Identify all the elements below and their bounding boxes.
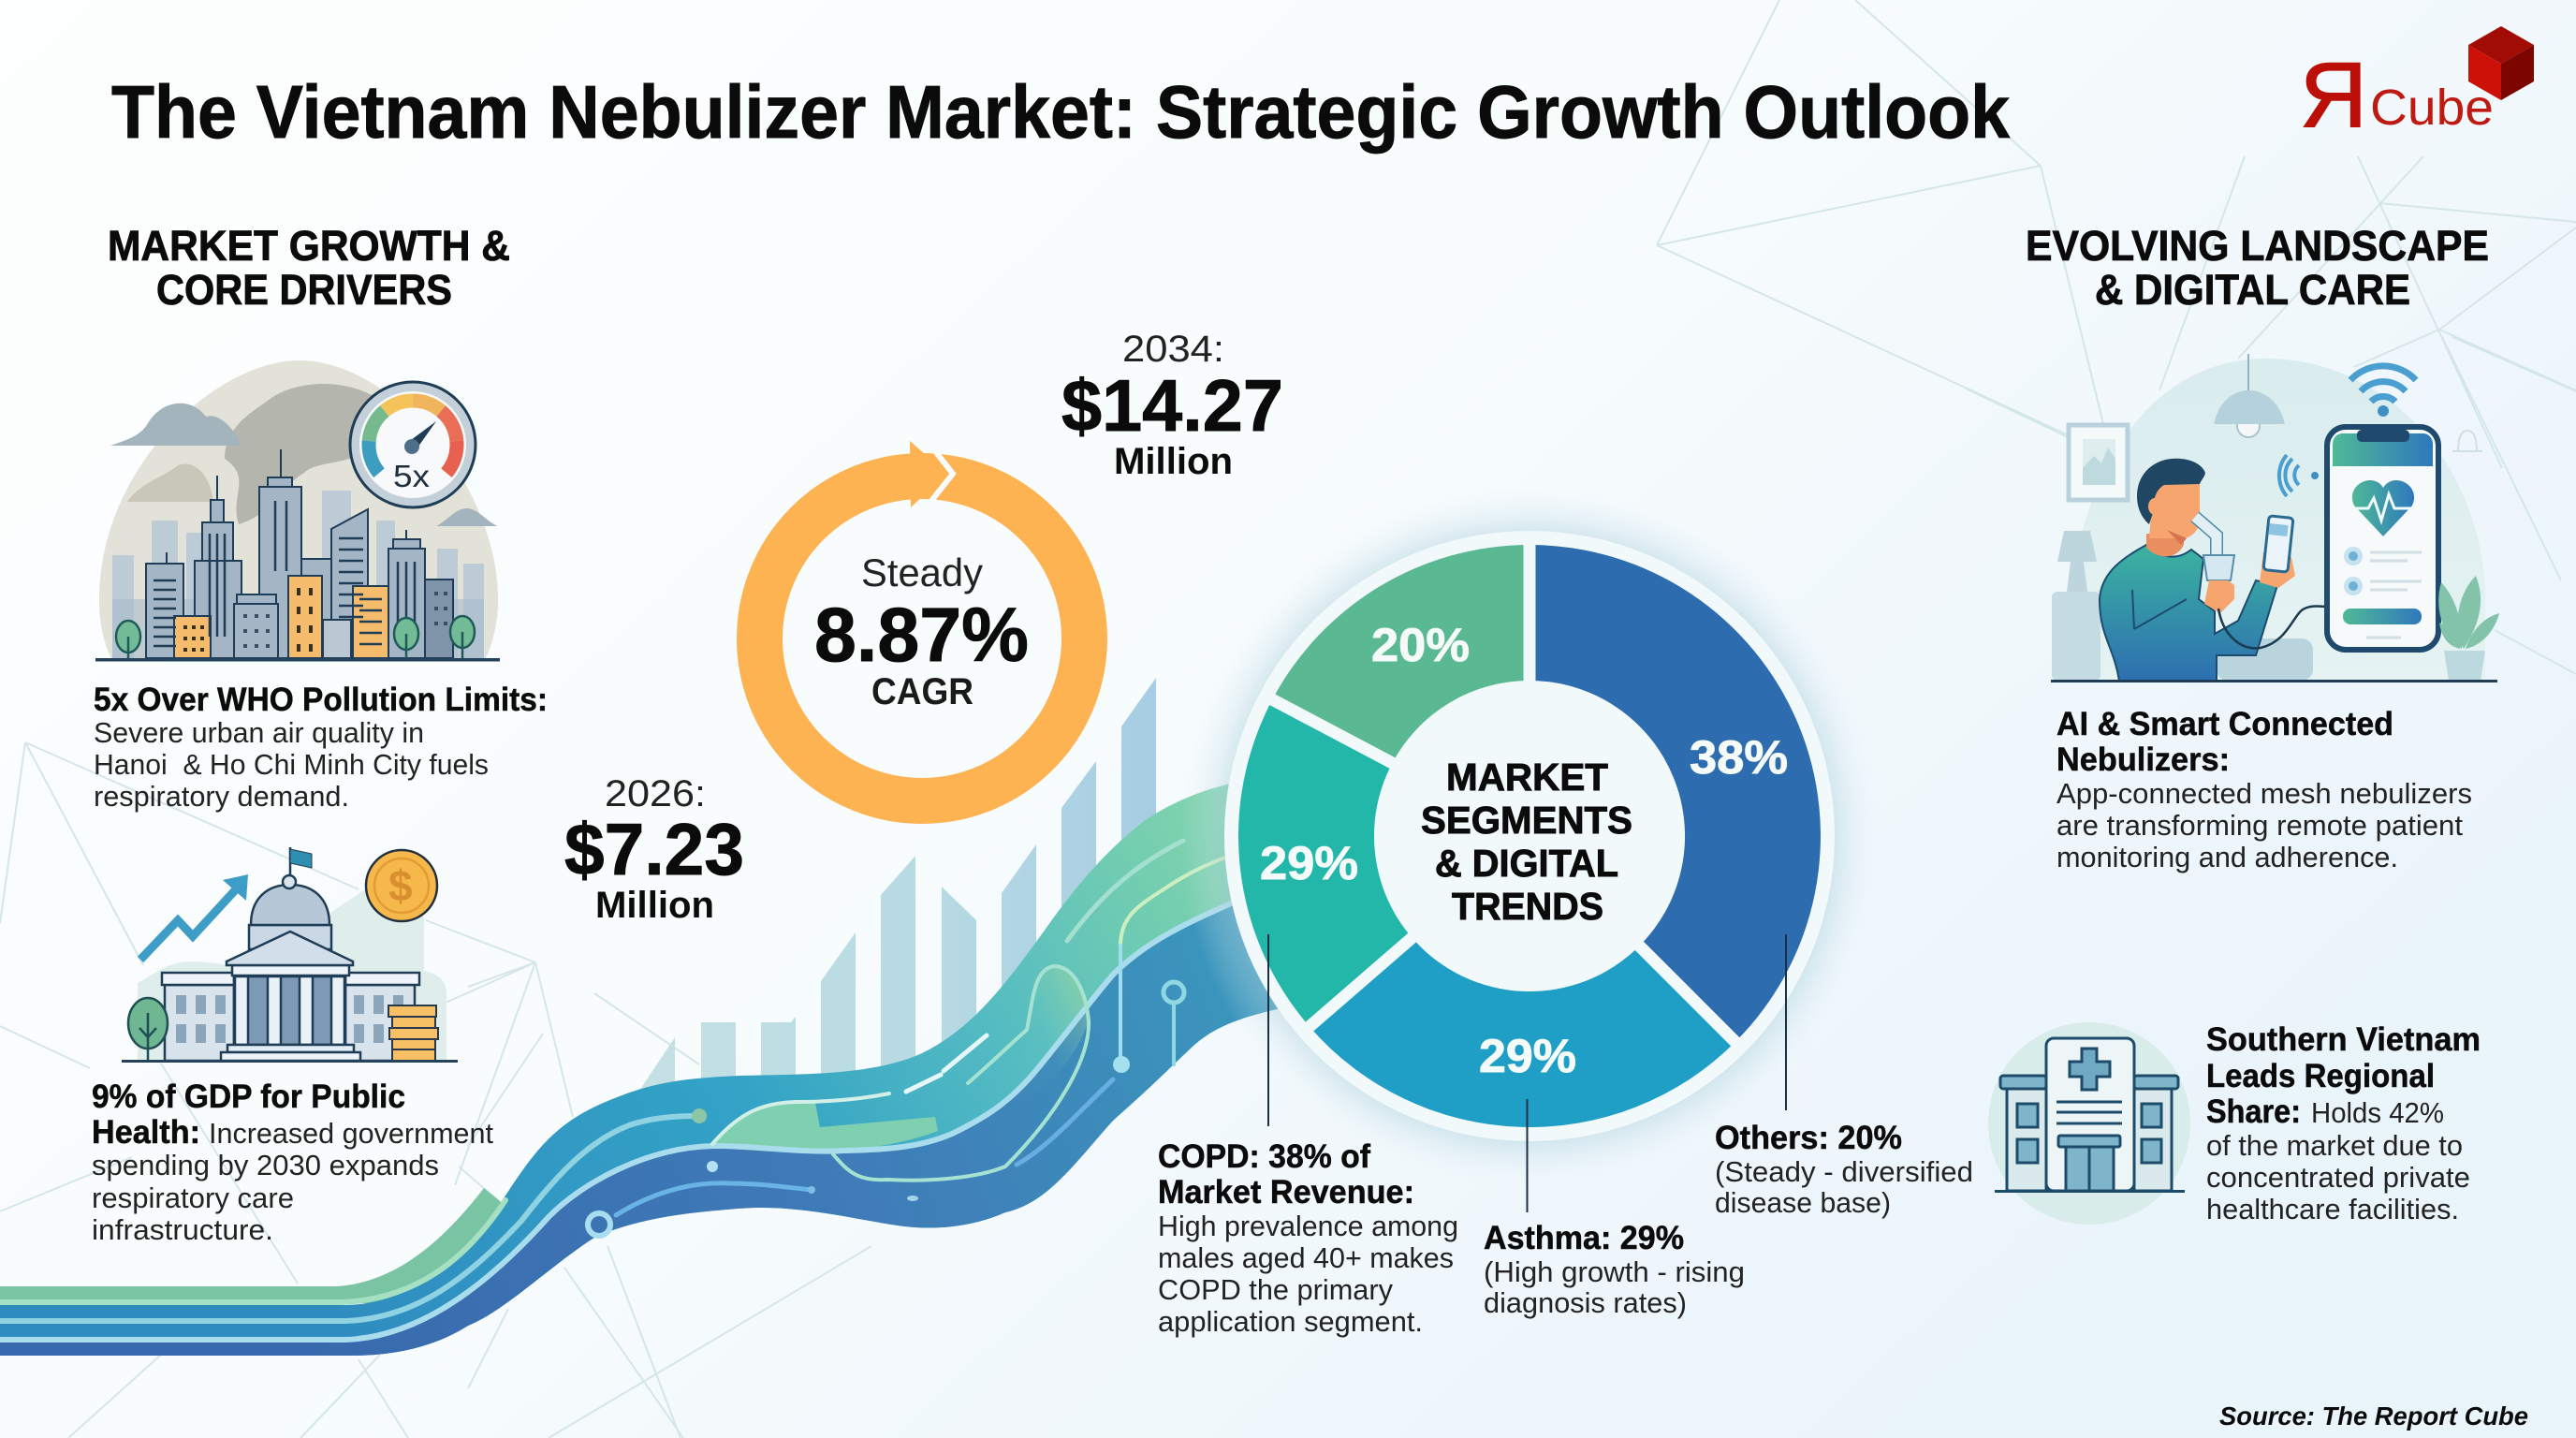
callout: COPD: Market Revenue:	[1158, 1174, 1414, 1211]
CAGR ring: CAGR	[871, 671, 973, 712]
growth wave	[0, 779, 1329, 1356]
text block: southern Vietnam share: Leads Regional	[2206, 1058, 2435, 1094]
percentage labels: 38%	[1690, 731, 1788, 784]
callout: Others: disease base)	[1715, 1186, 1891, 1219]
callout: Others	[1715, 1120, 1973, 1219]
panel: market segments donut chart	[1181, 488, 1878, 1184]
text block: southern Vietnam share: healthcare facilities.	[2206, 1193, 2459, 1225]
CAGR ring: Steady	[861, 550, 983, 594]
stat: 2026 value: Million	[595, 885, 714, 926]
icon: pollution gauge: 5x	[393, 459, 431, 493]
text block: pollution limits	[94, 682, 548, 813]
text block: southern Vietnam share	[2206, 1021, 2481, 1225]
source note: Source: The Report Cube	[2219, 1401, 2528, 1431]
text block: pollution limits: Severe urban air quality in	[94, 716, 424, 749]
stat: 2034 value	[1061, 329, 1283, 482]
icon: pollution gauge	[350, 382, 476, 507]
text block: GDP for public health	[92, 1078, 493, 1246]
callout: Others: (Steady - diversified	[1715, 1155, 1973, 1188]
icon: hospital	[1988, 1022, 2190, 1225]
text block: AI and smart connected nebulizers: App-connected mesh nebulizers	[2056, 777, 2472, 810]
stat: 2026 value: 2026:	[605, 773, 706, 814]
callout: Asthma: Asthma: 29%	[1484, 1220, 1684, 1256]
icon: government building with coins	[122, 847, 458, 1063]
text block: southern Vietnam share: Share:	[2206, 1093, 2301, 1130]
callout: Asthma: (High growth - rising	[1484, 1255, 1745, 1288]
donut centre title: SEGMENTS	[1421, 799, 1632, 842]
CAGR ring: 8.87%	[814, 593, 1029, 678]
potted plant	[2438, 576, 2499, 681]
text block: GDP for public health: spending by 2030 expands	[92, 1149, 439, 1181]
callout: Asthma: diagnosis rates)	[1484, 1286, 1687, 1319]
text block: AI and smart connected nebulizers: monitoring and adherence.	[2056, 841, 2398, 873]
heading: & DIGITAL CARE	[2095, 266, 2410, 314]
percentage labels: 20%	[1371, 619, 1470, 671]
text block: southern Vietnam share: Holds 42%	[2311, 1096, 2444, 1129]
text block: GDP for public health: 9% of GDP for Public	[92, 1078, 405, 1115]
panel: evolving landscape and digital care	[1988, 222, 2499, 1225]
logo: RCube: Cube	[2370, 80, 2494, 136]
logo: RCube: Я	[2300, 43, 2367, 146]
callout: COPD: High prevalence among	[1158, 1210, 1458, 1242]
text block: pollution limits: 5x Over WHO Pollution Limits:	[94, 682, 548, 718]
wifi signal	[2279, 366, 2416, 496]
donut centre title	[1421, 756, 1632, 928]
callout: COPD: COPD the primary	[1158, 1273, 1393, 1306]
segment: 38% blue	[1530, 545, 1821, 1042]
title: The Vietnam Nebulizer Market: Strategic Growth Outlook	[111, 70, 2010, 154]
patient figure	[2100, 459, 2327, 681]
bar chart backdrop	[637, 678, 1156, 1105]
percentage labels	[1260, 619, 1788, 1082]
text block: GDP for public health: respiratory care	[92, 1181, 294, 1214]
stat: 2034 value: $14.27	[1061, 364, 1283, 447]
logo: RCube	[2300, 26, 2534, 146]
heading	[2026, 222, 2489, 314]
callout: COPD: application segment.	[1158, 1305, 1423, 1338]
stat: 2026 value: $7.23	[564, 808, 744, 890]
text block: southern Vietnam share: Southern Vietnam	[2206, 1021, 2481, 1058]
callout: COPD: males aged 40+ makes	[1158, 1241, 1454, 1274]
percentage labels: 29%	[1479, 1030, 1576, 1082]
percentage labels: 29%	[1260, 837, 1358, 889]
text block: southern Vietnam share: of the market due to	[2206, 1129, 2463, 1162]
text block: AI and smart connected nebulizers: are transforming remote patient	[2056, 809, 2463, 842]
heading: MARKET GROWTH &	[108, 222, 510, 270]
callout: COPD: COPD: 38% of	[1158, 1138, 1370, 1175]
stat: 2026 value	[564, 773, 744, 926]
text block: southern Vietnam share: concentrated private	[2206, 1161, 2470, 1194]
text block: pollution limits: Hanoi & Ho Chi Minh City fuels	[94, 748, 489, 781]
segment: 29% cyan	[1310, 938, 1735, 1127]
panel: market growth and core drivers	[92, 222, 548, 1246]
text block: pollution limits: respiratory demand.	[94, 780, 349, 813]
donut centre title: MARKET	[1446, 756, 1608, 799]
smartphone app	[2327, 427, 2438, 650]
segment: 29% teal	[1238, 699, 1412, 1027]
text block: AI and smart connected nebulizers: Nebulizers:	[2056, 741, 2230, 778]
stat: 2034 value: Million	[1114, 441, 1233, 482]
text block: AI and smart connected nebulizers	[2056, 706, 2472, 873]
CAGR ring	[760, 441, 1084, 801]
donut centre title: & DIGITAL	[1435, 842, 1618, 885]
callout: Others: Others: 20%	[1715, 1120, 1902, 1156]
stat: 2034 value: 2034:	[1122, 329, 1224, 370]
callout: Asthma	[1484, 1220, 1745, 1319]
icon: government building with coins: $	[388, 861, 413, 910]
heading: EVOLVING LANDSCAPE	[2026, 222, 2489, 270]
icon: patient with smart nebulizer and phone	[2051, 354, 2499, 682]
heading	[108, 222, 510, 314]
text block: AI and smart connected nebulizers: AI & Smart Connected	[2056, 706, 2393, 742]
text block: GDP for public health: infrastructure.	[92, 1213, 273, 1246]
text block: GDP for public health: Increased government	[209, 1117, 493, 1150]
heading: CORE DRIVERS	[156, 266, 452, 314]
icon: polluted city with gauge	[95, 360, 500, 661]
donut centre title: TRENDS	[1452, 885, 1603, 928]
callout: COPD	[1158, 1138, 1458, 1338]
segment: 20% green	[1272, 545, 1530, 763]
text block: GDP for public health: Health:	[92, 1114, 200, 1151]
